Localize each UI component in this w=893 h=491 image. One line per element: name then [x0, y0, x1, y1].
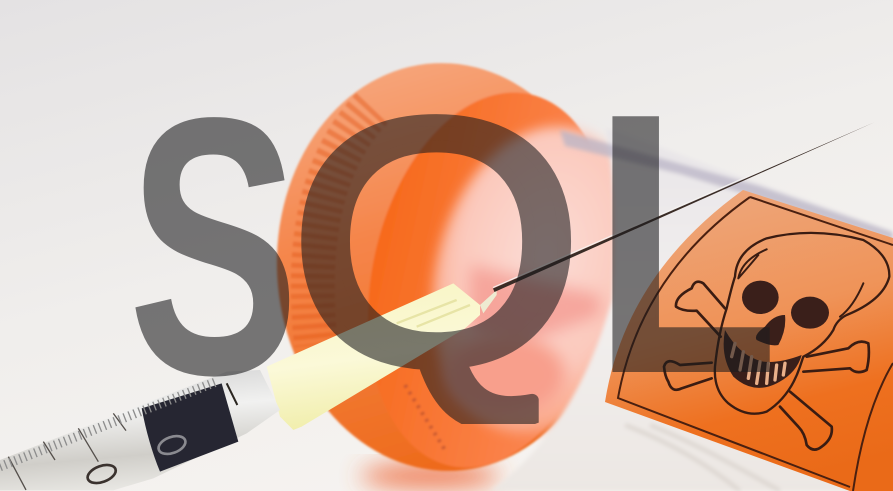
eyes [742, 281, 779, 314]
title: SQL [136, 114, 770, 424]
nose [756, 315, 785, 345]
cap rim [335, 70, 645, 490]
syringe needle hub [267, 283, 497, 430]
scale ticks [8, 413, 126, 490]
cap side [267, 54, 623, 480]
orange vial cap [267, 54, 675, 490]
letter S: S [128, 43, 299, 452]
label border [618, 197, 893, 491]
needle [493, 122, 875, 292]
skull highlight lines [738, 249, 863, 317]
cap ribs [313, 108, 372, 345]
crossbones [664, 282, 869, 450]
skull outline [715, 233, 889, 414]
hazard label [605, 190, 893, 491]
vial tube [490, 128, 893, 491]
teeth [724, 330, 802, 388]
letter L: L [594, 39, 777, 448]
barrel numerals [85, 461, 118, 487]
icon: skull and crossbones [664, 233, 889, 450]
interior red band [470, 265, 600, 345]
letter Q: Q [290, 49, 583, 435]
syringe plunger liquid [142, 383, 238, 472]
cap shadow reflection [360, 464, 500, 488]
syringe barrel [0, 370, 280, 490]
vial interior [405, 107, 675, 453]
